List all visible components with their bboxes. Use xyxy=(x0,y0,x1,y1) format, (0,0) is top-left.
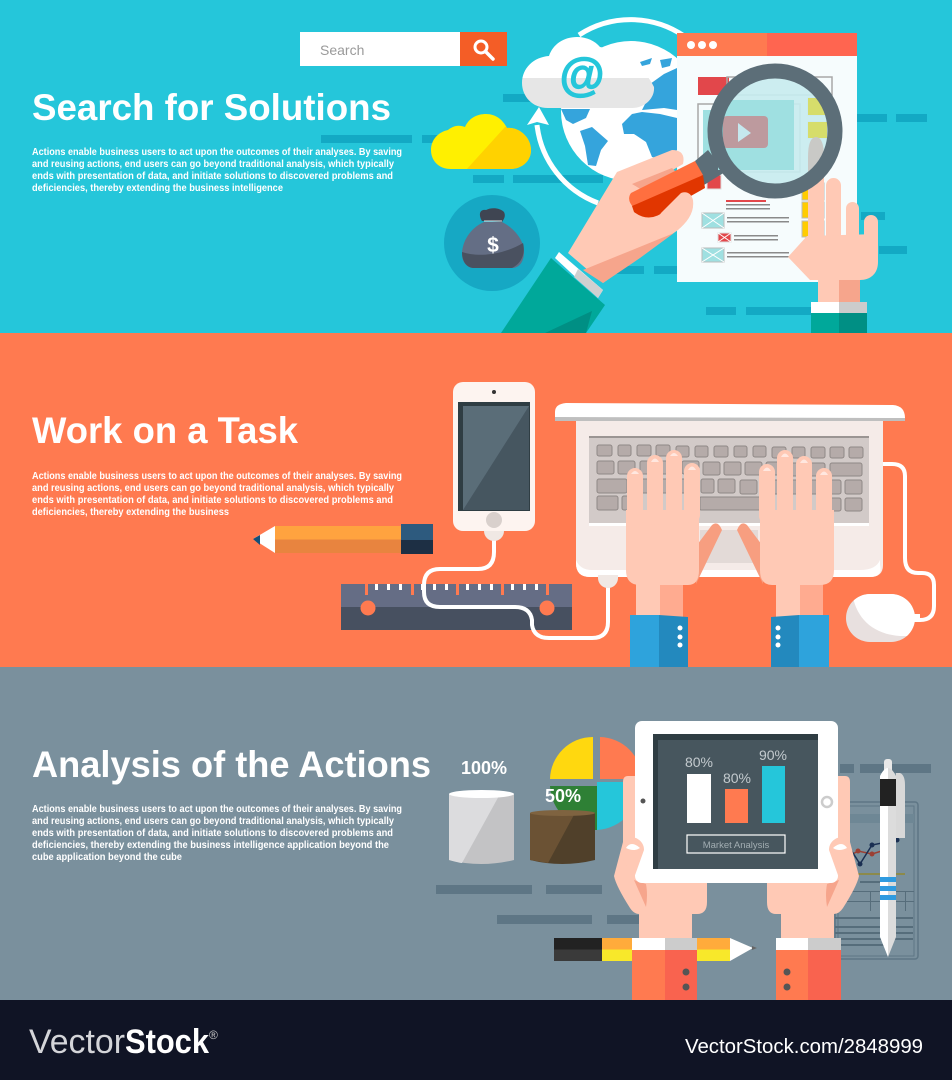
magnifying glass handle xyxy=(629,150,725,228)
connectors xyxy=(598,575,618,588)
search bar xyxy=(300,32,507,66)
body text: Actions enable business users to act upon the outcomes of their analyses. By saving xyxy=(32,146,402,158)
left hand xyxy=(501,150,692,333)
footer watermark bar xyxy=(0,1000,952,1080)
tablet: 80% xyxy=(685,754,713,770)
body text: deficiencies, thereby extending the business xyxy=(32,506,229,518)
panel: analysis of the actions xyxy=(0,667,952,1000)
magnifying glass lens xyxy=(715,71,835,191)
brown cylinder 50% xyxy=(530,786,595,864)
heading: Analysis of the Actions xyxy=(32,744,431,785)
body text: Actions enable business users to act upon the outcomes of their analyses. By saving xyxy=(32,470,402,482)
tablet: 90% xyxy=(759,747,787,763)
icon: money bag: $ xyxy=(487,234,499,257)
search bar: Search xyxy=(320,42,364,58)
pie chart xyxy=(550,737,642,830)
body text: deficiencies, thereby extending the business intelligence xyxy=(32,182,283,194)
brown cylinder 50%: 50% xyxy=(545,786,581,806)
right hand on keyboard xyxy=(737,450,834,667)
keyboard keys xyxy=(597,445,863,511)
grey cylinder 100% xyxy=(449,758,514,864)
body text: and reusing actions, end users can go beyond traditional analysis, which typically xyxy=(32,158,394,170)
body text: Actions enable business users to act upon the outcomes of their analyses. By saving xyxy=(32,803,402,815)
tablet: Market Analysis xyxy=(703,840,770,851)
body text xyxy=(32,146,402,194)
body text: ends with presentation of data, and initiate solutions to discovered problems and xyxy=(32,827,393,839)
pen xyxy=(880,759,905,957)
pencil xyxy=(554,938,757,961)
icon: globe with ring xyxy=(527,20,701,203)
tablet: 80% xyxy=(723,770,751,786)
laptop xyxy=(555,403,905,577)
body text xyxy=(32,470,402,518)
icon: yellow cloud xyxy=(431,114,531,169)
right hand holding tablet xyxy=(767,776,859,1000)
icon: money bag xyxy=(444,195,540,291)
heading: Work on a Task xyxy=(32,410,298,451)
logo: ® xyxy=(209,1028,218,1042)
phone xyxy=(453,382,535,541)
mouse xyxy=(846,590,920,642)
panel: work on a task xyxy=(0,333,952,667)
background dashes xyxy=(436,764,931,924)
left hand on keyboard xyxy=(626,450,722,667)
left hand holding tablet xyxy=(614,776,707,1000)
image id: VectorStock.com/2848999 xyxy=(685,1036,923,1058)
logo: VectorStock xyxy=(29,1023,218,1061)
body text: and reusing actions, end users can go beyond traditional analysis, which typically xyxy=(32,482,394,494)
panel: search for solutions xyxy=(0,0,952,333)
cables xyxy=(424,464,934,638)
thumbs xyxy=(623,838,850,878)
body text: deficiencies, thereby extending the business intelligence application beyond the xyxy=(32,839,389,851)
body text: ends with presentation of data, and initiate solutions to discovered problems and xyxy=(32,494,393,506)
ruler xyxy=(341,584,572,630)
grey cylinder 100%: 100% xyxy=(461,758,507,778)
body text: and reusing actions, end users can go beyond traditional analysis, which typically xyxy=(32,815,394,827)
document with chart xyxy=(835,802,918,959)
heading: Search for Solutions xyxy=(32,87,391,128)
tablet xyxy=(635,721,838,883)
right hand behind lens xyxy=(788,140,878,333)
pencil xyxy=(253,524,433,554)
icon: white cloud with at sign: @ xyxy=(560,48,604,100)
body text xyxy=(32,803,402,863)
browser window xyxy=(677,33,857,282)
background dashes xyxy=(321,94,927,315)
body text: ends with presentation of data, and initiate solutions to discovered problems and xyxy=(32,170,393,182)
icon: white cloud with at sign xyxy=(522,37,654,108)
body text: cube application beyond the cube xyxy=(32,851,182,863)
